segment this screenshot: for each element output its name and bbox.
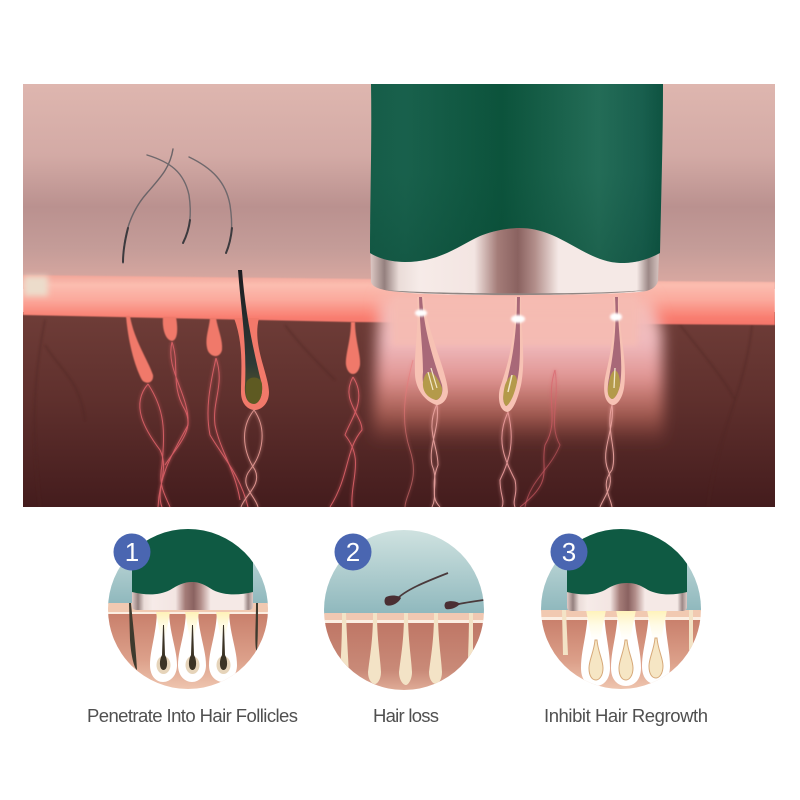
treated follicle 1 bbox=[415, 297, 448, 405]
upper skin background bbox=[23, 84, 775, 289]
sky background bbox=[324, 530, 484, 614]
light sparks bbox=[415, 310, 622, 323]
step 2 number badge bbox=[334, 534, 372, 570]
step 3 number badge: 3 bbox=[562, 537, 576, 567]
step 1 number badge: 1 bbox=[125, 537, 139, 567]
treated follicle 2 bbox=[499, 297, 523, 412]
empty follicles bbox=[340, 613, 473, 685]
sky background bbox=[108, 529, 268, 604]
skin layers bbox=[108, 603, 268, 612]
step 2 label: Hair loss bbox=[373, 705, 439, 726]
step 3 number badge bbox=[550, 534, 588, 570]
side follicles bbox=[562, 610, 693, 655]
band glow under device bbox=[397, 330, 634, 340]
glowing epidermis band bbox=[23, 275, 775, 325]
metal tip bbox=[370, 224, 660, 295]
green body bbox=[370, 84, 663, 263]
device: green hair removal head bbox=[370, 84, 663, 295]
step 3 illustration bbox=[541, 525, 701, 690]
white follicles with faded bulbs bbox=[581, 610, 670, 686]
light beam under device bbox=[372, 296, 664, 445]
main hair follicle with dark shaft bbox=[234, 270, 269, 410]
step 1 label: Penetrate Into Hair Follicles bbox=[87, 705, 298, 726]
falling hairs bbox=[384, 573, 484, 609]
nerve strands left bbox=[140, 342, 362, 507]
step 2 illustration bbox=[324, 530, 484, 691]
dermis layer bbox=[23, 312, 775, 507]
device head bbox=[567, 525, 687, 611]
step 1 illustration bbox=[108, 525, 268, 690]
faint dermis veins bbox=[41, 322, 752, 398]
white follicles with dark bulbs bbox=[150, 612, 237, 682]
side hairs bbox=[129, 603, 258, 670]
small follicles bbox=[126, 316, 360, 383]
device head bbox=[132, 525, 253, 610]
treated follicle 3 bbox=[604, 297, 625, 405]
step 2 number badge: 2 bbox=[346, 537, 360, 567]
step 3 label: Inhibit Hair Regrowth bbox=[544, 705, 708, 726]
sky background bbox=[541, 529, 701, 611]
skin layers bbox=[324, 613, 484, 621]
loose hairs bbox=[123, 149, 232, 263]
skin layers bbox=[541, 610, 701, 618]
step 1 number badge bbox=[114, 534, 150, 570]
band highlight at left edge bbox=[24, 276, 48, 296]
nerve strands right bbox=[404, 360, 614, 507]
panel: main skin cross-section illustration bbox=[23, 84, 775, 507]
